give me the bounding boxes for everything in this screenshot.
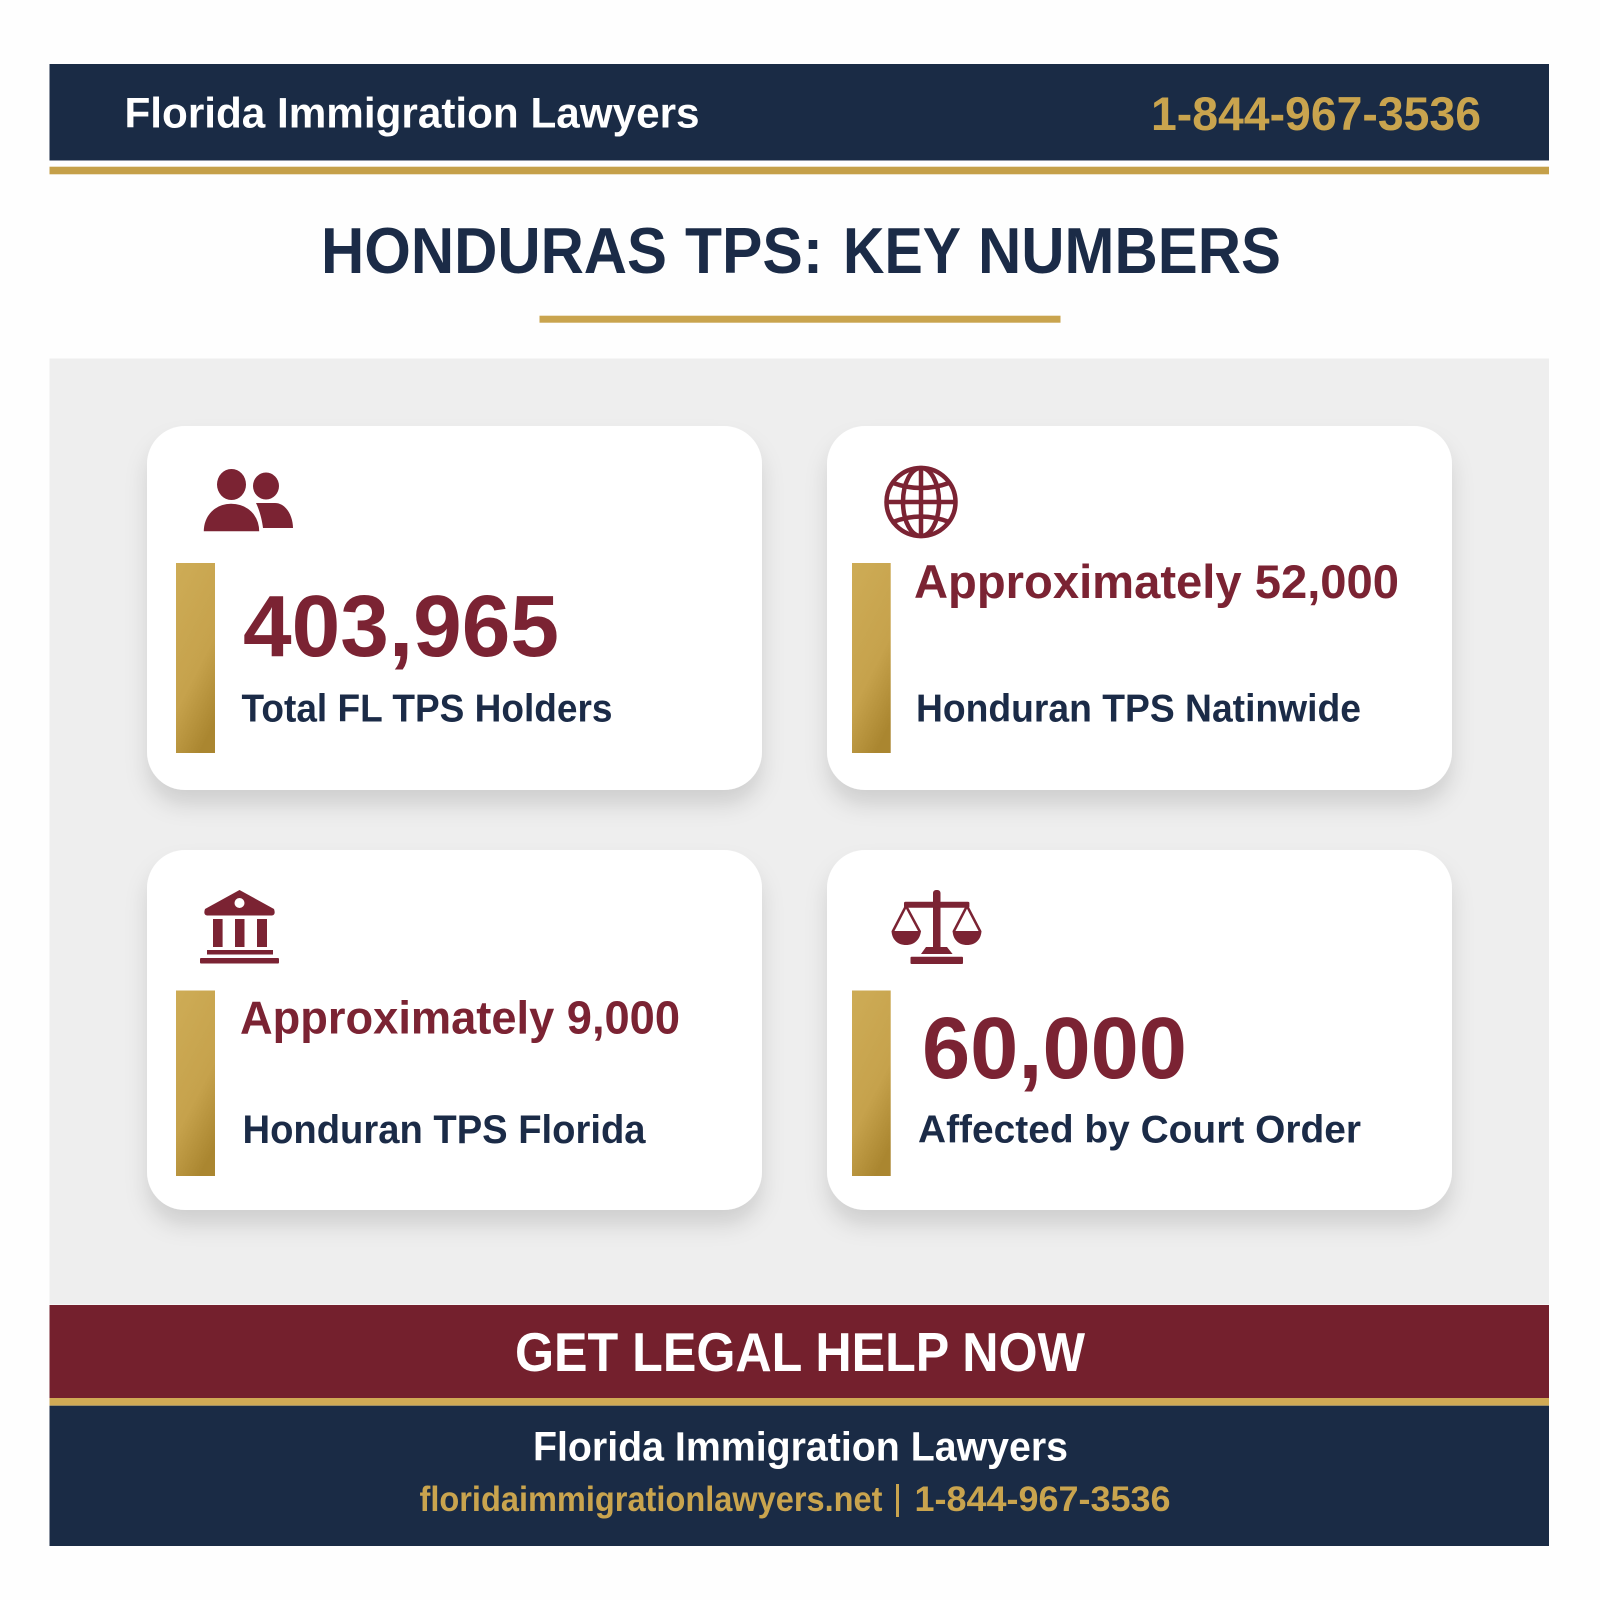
card: Honduran TPS nationwide (827, 426, 1452, 790)
card: Honduran TPS Florida (147, 850, 762, 1210)
footer (50, 1406, 1549, 1546)
title gold underline (540, 316, 1060, 323)
stat label: Honduran TPS Natinwide (916, 688, 1361, 730)
stat value: Approximately 9,000 (240, 992, 680, 1044)
stat value: Approximately 52,000 (914, 555, 1399, 608)
title (321, 214, 1281, 287)
title: KEY (843, 214, 961, 287)
footer phone number: 1-844-967-3536 (914, 1480, 1170, 1519)
icon: courthouse (200, 890, 279, 964)
gold accent bar (852, 563, 891, 753)
footer website: floridaimmigrationlawyers.net (420, 1480, 883, 1519)
gold accent bar (176, 990, 215, 1176)
header phone number: 1-844-967-3536 (1151, 87, 1481, 140)
stat value: 60,000 (922, 1000, 1187, 1097)
icon: people (203, 469, 293, 532)
grey stats panel (50, 358, 1549, 1304)
call to action banner (50, 1305, 1549, 1398)
stat label: Honduran TPS Florida (242, 1108, 646, 1152)
icon: scales of justice (892, 890, 982, 964)
card: affected by court order (827, 850, 1452, 1210)
header gold rule (50, 167, 1549, 174)
stat label: Affected by Court Order (918, 1108, 1361, 1152)
header firm name: Florida Immigration Lawyers (124, 90, 700, 138)
title: TPS: (685, 214, 823, 287)
card: total FL TPS holders (147, 426, 762, 790)
title: NUMBERS (978, 214, 1281, 287)
title: HONDURAS (321, 214, 667, 287)
footer firm name: Florida Immigration Lawyers (533, 1424, 1068, 1470)
footer gold rule (50, 1398, 1549, 1406)
icon: globe (886, 468, 956, 536)
gold accent bar (852, 990, 891, 1176)
stat label: Total FL TPS Holders (242, 688, 612, 730)
stat value: 403,965 (243, 578, 559, 675)
gold accent bar (176, 563, 215, 753)
call to action text: GET LEGAL HELP NOW (515, 1321, 1085, 1383)
footer separator (896, 1484, 899, 1517)
header bar (50, 64, 1549, 160)
